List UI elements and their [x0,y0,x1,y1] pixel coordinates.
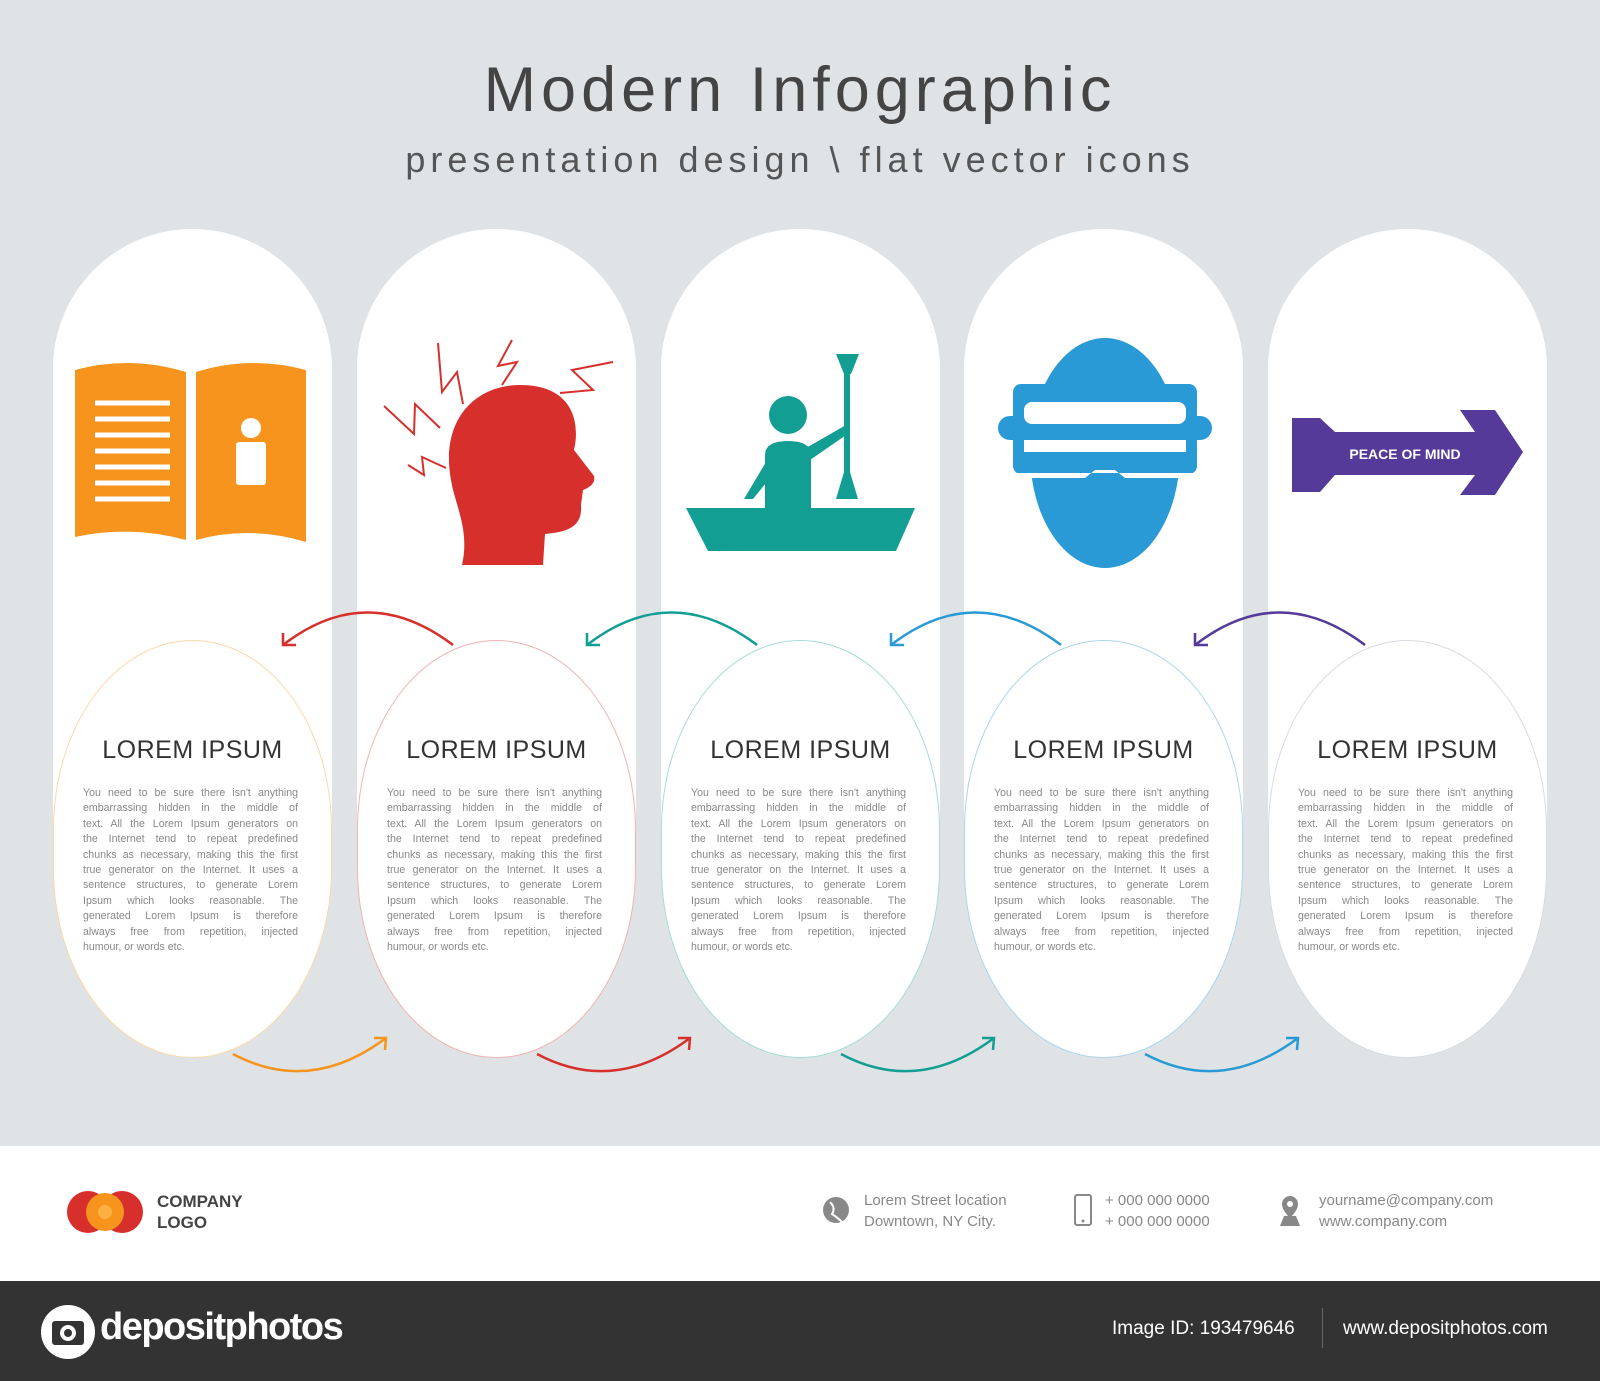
panel 1 text oval: true generator on the Internet. It uses a [83,864,298,876]
footer [0,1146,1600,1281]
panel 4 text oval: text. All the Lorem Ipsum generators on [994,818,1209,830]
panel 3 text oval: generated Lorem Ipsum is therefore [691,910,906,922]
panel 3 text oval: sentence structures, to generate Lorem [691,879,906,891]
panel 2 text oval: always free from repetition, injected [387,926,602,938]
panel 3 text oval: LOREM IPSUM [710,736,891,764]
panel 3 text oval [661,640,940,1058]
panel 3 text oval: Ipsum which looks reasonable. The [691,895,906,907]
icon: open book [75,363,306,542]
arrows: bottom (left to right) [233,1038,1298,1071]
watermark bar [0,1281,1600,1381]
panel 5 text oval: true generator on the Internet. It uses a [1298,864,1513,876]
panel 2 text oval: true generator on the Internet. It uses a [387,864,602,876]
icon: person rowing boat [686,354,915,551]
subtitle: presentation design \ flat vector icons [405,139,1195,180]
panel 4 text oval: true generator on the Internet. It uses a [994,864,1209,876]
panel 1 text oval: Ipsum which looks reasonable. The [83,895,298,907]
panel 1 text oval: LOREM IPSUM [102,736,283,764]
panel 3 text oval: text. All the Lorem Ipsum generators on [691,818,906,830]
panel 2 text oval: the Internet tend to repeat predefined [387,833,602,845]
panel 4 text oval: the Internet tend to repeat predefined [994,833,1209,845]
panel 4 text oval: You need to be sure there isn't anything [994,787,1209,799]
contact: address: Downtown, NY City. [864,1213,996,1230]
panel 5 text oval: LOREM IPSUM [1317,736,1498,764]
image id: Image ID: 193479646 [1112,1318,1295,1339]
contact: address [823,1192,1007,1230]
panel 4 text oval: LOREM IPSUM [1013,736,1194,764]
panel 1 text oval: text. All the Lorem Ipsum generators on [83,818,298,830]
contact: email: yourname@company.com [1319,1192,1493,1209]
contact: address: Lorem Street location [864,1192,1007,1209]
panel 5 text oval: text. All the Lorem Ipsum generators on [1298,818,1513,830]
panel 1 text oval: You need to be sure there isn't anything [83,787,298,799]
contact: email: www.company.com [1319,1213,1447,1230]
panel 5 text oval: always free from repetition, injected [1298,926,1513,938]
panel 3 background [661,229,940,829]
panel 5 text oval: sentence structures, to generate Lorem [1298,879,1513,891]
icon: VR headset face [998,338,1212,568]
panel 4 text oval: chunks as necessary, making this the first [994,849,1209,861]
panel 1 text oval: generated Lorem Ipsum is therefore [83,910,298,922]
panel 5 text oval: chunks as necessary, making this the first [1298,849,1513,861]
panel 3 text oval: humour, or words etc. [691,941,793,953]
panel 5 text oval [1268,640,1547,1058]
panel 2 text oval: humour, or words etc. [387,941,489,953]
panel 2 text oval: embarrassing hidden in the middle of [387,802,602,814]
company logo: LOGO [157,1213,207,1232]
contact: phone [1074,1192,1210,1230]
panel 1 text oval: chunks as necessary, making this the first [83,849,298,861]
panel 2 text oval: LOREM IPSUM [406,736,587,764]
panel 5 text oval: generated Lorem Ipsum is therefore [1298,910,1513,922]
panel 4 text oval: generated Lorem Ipsum is therefore [994,910,1209,922]
panel 4 text oval [964,640,1243,1058]
contact: email [1280,1192,1493,1230]
panel 2 background [357,229,636,829]
panel 2 text oval: text. All the Lorem Ipsum generators on [387,818,602,830]
panel 2 text oval: You need to be sure there isn't anything [387,787,602,799]
panel 1 text oval: humour, or words etc. [83,941,185,953]
panel 2 text oval: generated Lorem Ipsum is therefore [387,910,602,922]
contact: phone: + 000 000 0000 [1105,1192,1210,1209]
site url: www.depositphotos.com [1343,1318,1548,1339]
panel 5 text oval: humour, or words etc. [1298,941,1400,953]
panel 3 text oval: true generator on the Internet. It uses a [691,864,906,876]
panel 1 text oval: always free from repetition, injected [83,926,298,938]
panel 5 text oval: embarrassing hidden in the middle of [1298,802,1513,814]
panel 2 text oval [357,640,636,1058]
panel 4 text oval: sentence structures, to generate Lorem [994,879,1209,891]
panel 2 text oval: sentence structures, to generate Lorem [387,879,602,891]
contact: phone: + 000 000 0000 [1105,1213,1210,1230]
icon: peace of mind arrow: PEACE OF MIND [1349,446,1461,462]
panel 3 text oval: always free from repetition, injected [691,926,906,938]
icon: peace of mind arrow [1292,410,1523,495]
company logo: COMPANY [157,1192,243,1211]
panel 4 text oval: always free from repetition, injected [994,926,1209,938]
panel 3 text oval: chunks as necessary, making this the first [691,849,906,861]
panel 1 background [53,229,332,829]
panel 4 text oval: Ipsum which looks reasonable. The [994,895,1209,907]
panel 5 text oval: the Internet tend to repeat predefined [1298,833,1513,845]
panel 2 text oval: chunks as necessary, making this the first [387,849,602,861]
panel 4 text oval: humour, or words etc. [994,941,1096,953]
panel 4 text oval: embarrassing hidden in the middle of [994,802,1209,814]
panel 5 background [1268,229,1547,829]
company logo [67,1191,243,1233]
title: Modern Infographic [484,55,1116,125]
panel 5 text oval: Ipsum which looks reasonable. The [1298,895,1513,907]
panel 1 text oval: the Internet tend to repeat predefined [83,833,298,845]
panel 3 text oval: embarrassing hidden in the middle of [691,802,906,814]
panel 3 text oval: the Internet tend to repeat predefined [691,833,906,845]
panel 1 text oval: sentence structures, to generate Lorem [83,879,298,891]
panel 3 text oval: You need to be sure there isn't anything [691,787,906,799]
panel 5 text oval: You need to be sure there isn't anything [1298,787,1513,799]
icon: headache head [384,340,613,565]
panel 1 text oval [53,640,332,1058]
depositphotos logo [41,1305,342,1359]
arrows: top (right to left) [283,612,1365,645]
panel 2 text oval: Ipsum which looks reasonable. The [387,895,602,907]
panel 4 background [964,229,1243,829]
depositphotos logo: depositphotos [100,1306,342,1348]
panel 1 text oval: embarrassing hidden in the middle of [83,802,298,814]
